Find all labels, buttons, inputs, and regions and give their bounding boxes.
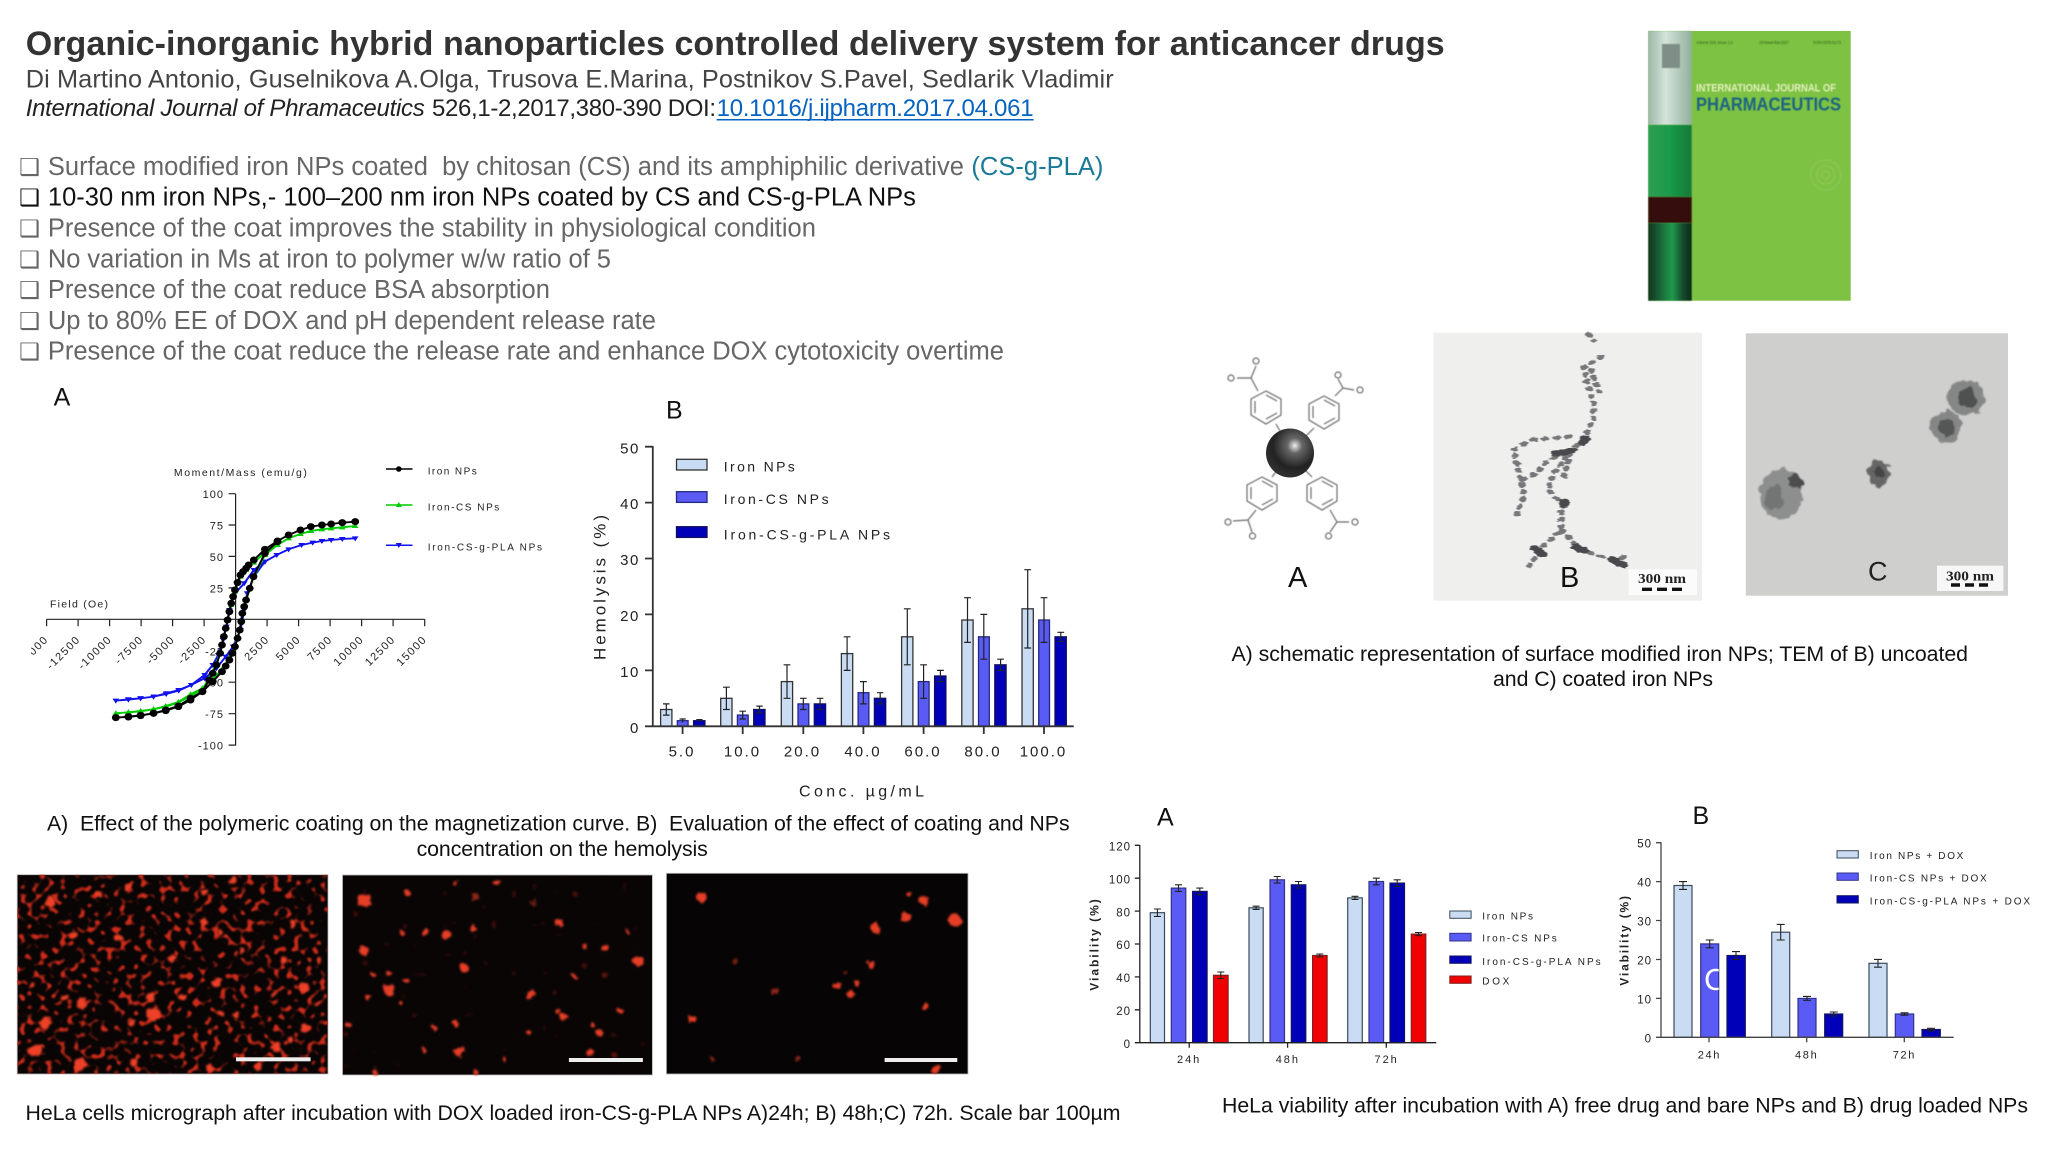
legend: Iron-CS-g-PLA NPs bbox=[724, 526, 890, 542]
scale bar: 300 nm bbox=[1638, 572, 1686, 587]
bullet 5: Presence of the coat reduce BSA absorption bbox=[48, 276, 550, 304]
caption: TEM bbox=[1232, 642, 1968, 691]
authors: Di Martino Antonio, Guselnikova A.Olga, Trusova E.Marina, Postnikov S.Pavel, Sedlarik Vladimir bbox=[26, 65, 1114, 93]
bars bbox=[1150, 880, 1426, 1043]
legend bbox=[1450, 911, 1601, 987]
bullet 5: ❑ bbox=[19, 276, 40, 304]
y tick labels: 75 bbox=[210, 520, 224, 532]
x tick labels: 72h bbox=[1893, 1049, 1914, 1061]
panel letter A: A bbox=[54, 384, 71, 412]
x tick labels: 100.0 bbox=[1020, 744, 1067, 761]
x tick labels: 48h bbox=[1795, 1049, 1817, 1061]
hexagon rings bbox=[1247, 391, 1339, 510]
bars bbox=[1674, 886, 1940, 1037]
y tick labels: 25 bbox=[210, 583, 224, 595]
stray white letter C on bar: C bbox=[1704, 962, 1726, 997]
hysteresis curves bbox=[116, 522, 355, 718]
y tick labels bbox=[620, 440, 640, 737]
y tick labels: 40 bbox=[620, 496, 640, 513]
x tick labels: -7500 bbox=[113, 634, 146, 667]
x tick labels: 48h bbox=[1276, 1054, 1298, 1066]
x tick labels bbox=[31, 637, 425, 668]
y axis title: Viability (%) bbox=[1088, 899, 1102, 991]
y tick labels bbox=[198, 489, 224, 753]
y tick labels: 10 bbox=[1637, 994, 1652, 1006]
bullet list bbox=[19, 153, 1103, 365]
bullet 1: (CS-g-PLA) bbox=[971, 153, 1103, 181]
bullet 2: 10-30 nm iron NPs,- 100–200 nm iron NPs coated by CS and CS-g-PLA NPs bbox=[48, 184, 916, 212]
y tick labels: 80 bbox=[1116, 907, 1131, 919]
legend: Iron NPs bbox=[428, 466, 477, 477]
y tick labels: 0 bbox=[1124, 1039, 1131, 1051]
panel: magnetization curve chart A: Field (Oe) bbox=[50, 599, 108, 611]
legend: Iron-CS NPs bbox=[1482, 934, 1557, 945]
y tick labels: -100 bbox=[198, 741, 224, 753]
error bars bbox=[663, 570, 1064, 722]
label B: B bbox=[1560, 562, 1579, 594]
panel letter A: A bbox=[1157, 804, 1174, 832]
legend: DOX bbox=[1482, 976, 1510, 987]
x tick labels: 5.0 bbox=[669, 744, 695, 761]
y tick labels: 30 bbox=[1637, 916, 1652, 928]
micrograph 72h bbox=[666, 873, 968, 1074]
bullet 4: No variation in Ms at iron to polymer w/w ratio of 5 bbox=[48, 245, 611, 273]
legend: Iron-CS-g-PLA NPs bbox=[428, 543, 542, 554]
x tick labels bbox=[1698, 1049, 1914, 1061]
y tick labels: 40 bbox=[1116, 973, 1131, 985]
legend: Iron NPs bbox=[1482, 911, 1533, 922]
panel: TEM uncoated B bbox=[1434, 333, 1702, 601]
y tick labels: 20 bbox=[1637, 956, 1652, 968]
x tick labels: 5000 bbox=[274, 634, 304, 663]
y tick labels: 60 bbox=[1116, 940, 1131, 952]
y tick labels: 120 bbox=[1109, 842, 1131, 854]
journal cover: INTERNATIONAL JOURNAL OF bbox=[1696, 83, 1836, 95]
panel: molecular schematic A bbox=[1225, 358, 1363, 594]
caption: viability: HeLa viability after incubation with A) free drug and bare NPs and B) drug loaded NPs bbox=[1222, 1094, 2028, 1118]
error bars bbox=[1679, 882, 1935, 1031]
axis titles: Moment/Mass (emu/g) bbox=[174, 467, 307, 479]
bullet 7: ❑ bbox=[19, 337, 40, 365]
axes bbox=[1135, 845, 1436, 1048]
panel: TEM coated C bbox=[1746, 333, 2008, 596]
y tick labels bbox=[1637, 839, 1652, 1045]
y axis title: Viability (%) bbox=[1617, 896, 1631, 986]
x tick labels: 20.0 bbox=[784, 744, 821, 761]
legend: Iron-CS NPs bbox=[724, 491, 829, 507]
legend bbox=[386, 466, 542, 554]
y tick labels: 10 bbox=[620, 664, 640, 681]
x tick labels: 72h bbox=[1374, 1054, 1397, 1066]
legend bbox=[676, 459, 890, 542]
bullet 1: Surface modified iron NPs coated by chitosan (CS) and its amphiphilic derivative bbox=[48, 153, 964, 181]
y tick labels: 20 bbox=[1116, 1006, 1131, 1018]
x tick labels: 60.0 bbox=[904, 744, 942, 761]
x tick labels: 7500 bbox=[305, 634, 335, 663]
legend: Iron-CS NPs + DOX bbox=[1870, 874, 1987, 885]
x tick labels bbox=[1177, 1054, 1397, 1066]
micrograph 24h bbox=[17, 875, 328, 1074]
y tick labels: 20 bbox=[620, 608, 640, 625]
scale bar bbox=[885, 1058, 957, 1062]
caption: magnetization and hemolysis: concentration on the hemolysis bbox=[417, 837, 708, 861]
bullet 4: ❑ bbox=[19, 245, 40, 273]
y tick labels: 100 bbox=[1109, 874, 1131, 886]
caption: micrographs: HeLa cells micrograph after incubation with DOX loaded iron-CS-g-PLA NPs A)24h; B) 48h;C) 72h. Scale bar 100µm bbox=[26, 1101, 1120, 1125]
x tick labels: 24h bbox=[1698, 1049, 1719, 1061]
y tick labels: 30 bbox=[620, 552, 640, 569]
x tick labels: -10000 bbox=[76, 634, 115, 672]
journal citation bbox=[26, 95, 1034, 122]
x tick labels: 2500 bbox=[242, 634, 272, 663]
x tick labels: 15000 bbox=[395, 634, 430, 669]
legend: Iron NPs bbox=[724, 459, 795, 475]
axes bbox=[47, 494, 425, 746]
x tick labels: 10000 bbox=[332, 634, 367, 669]
iron sphere bbox=[1266, 428, 1314, 478]
micrograph 48h bbox=[342, 875, 652, 1076]
journal cover: Volume 526, Issue 1-2 bbox=[1696, 40, 1733, 45]
panel letter B: B bbox=[666, 396, 683, 424]
bullet 2: ❑ bbox=[19, 184, 40, 212]
panel: viability chart A bbox=[1088, 804, 1601, 1066]
scale bar bbox=[569, 1058, 643, 1062]
bullet 1: ❑ bbox=[19, 153, 40, 181]
scale bar bbox=[1628, 569, 1697, 595]
x tick labels bbox=[669, 744, 1067, 761]
panel: hemolysis bar chart B bbox=[590, 396, 1074, 801]
legend: Iron NPs + DOX bbox=[1870, 851, 1964, 862]
y tick labels: 100 bbox=[203, 489, 224, 501]
journal citation: 526,1-2,2017,380-390 DOI: bbox=[432, 95, 716, 122]
caption: magnetization and hemolysis: A) Effect of the polymeric coating on the magnetization curve. B) Evaluation of the effect of coating and NPs bbox=[47, 812, 1070, 836]
bullet 3: ❑ bbox=[19, 215, 40, 243]
coated particles bbox=[1760, 380, 1984, 519]
journal cover: ISSN 0378-5173 bbox=[1813, 40, 1841, 45]
scale bar bbox=[236, 1057, 311, 1061]
y tick labels: 50 bbox=[620, 440, 640, 457]
y tick labels: 0 bbox=[630, 720, 640, 737]
bars bbox=[661, 609, 1066, 726]
x tick labels: 10.0 bbox=[724, 744, 761, 761]
legend: Iron-CS-g-PLA NPs + DOX bbox=[1870, 896, 2030, 907]
x tick labels: 40.0 bbox=[844, 744, 882, 761]
axes bbox=[645, 446, 1074, 734]
bullet 3: Presence of the coat improves the stability in physiological condition bbox=[48, 215, 816, 243]
journal citation: International Journal of Phramaceutics bbox=[26, 95, 425, 122]
legend: Iron-CS NPs bbox=[428, 502, 499, 513]
x tick labels: -2500 bbox=[176, 634, 209, 667]
title: Organic-inorganic hybrid nanoparticles controlled delivery system for anticancer drugs bbox=[26, 25, 1445, 63]
panel: viability chart B bbox=[1617, 802, 2030, 1061]
caption: TEM: and C) coated iron NPs bbox=[1493, 667, 1713, 691]
bullet 6: ❑ bbox=[19, 307, 40, 335]
y tick labels bbox=[1109, 842, 1131, 1051]
bullet 7: Presence of the coat reduce the release rate and enhance DOX cytotoxicity overtime bbox=[48, 337, 1004, 365]
scale bar bbox=[1937, 566, 2003, 591]
y tick labels: -25 bbox=[205, 646, 224, 658]
label A: A bbox=[1288, 562, 1308, 594]
x tick labels: 24h bbox=[1177, 1054, 1199, 1066]
y tick labels: -50 bbox=[205, 678, 224, 690]
journal cover: 15 November 2017 bbox=[1759, 40, 1789, 45]
y tick labels: 40 bbox=[1637, 878, 1652, 890]
x axis title: Conc. µg/mL bbox=[799, 784, 924, 801]
caption: magnetization and hemolysis bbox=[47, 812, 1070, 861]
label C: C bbox=[1868, 557, 1888, 587]
y tick labels: -75 bbox=[205, 709, 224, 721]
y tick labels: 0 bbox=[1645, 1033, 1652, 1045]
y tick labels: 50 bbox=[1637, 839, 1652, 851]
y tick labels: 50 bbox=[210, 552, 224, 564]
error bars bbox=[1154, 876, 1422, 979]
journal cover bbox=[1648, 31, 1851, 301]
legend bbox=[1837, 851, 2030, 907]
panel: magnetization curve chart A bbox=[12, 384, 542, 753]
scale bar: 300 nm bbox=[1946, 570, 1994, 585]
legend: Iron-CS-g-PLA NPs bbox=[1482, 957, 1601, 968]
caption: TEM: A) schematic representation of surface modified iron NPs; TEM of B) uncoated bbox=[1232, 642, 1968, 666]
journal cover: PHARMACEUTICS bbox=[1696, 95, 1841, 115]
x tick labels: -15000 bbox=[12, 634, 51, 672]
x tick labels: 80.0 bbox=[964, 744, 1002, 761]
y axis title: Hemolysis (%) bbox=[590, 515, 610, 660]
x tick labels: -12500 bbox=[44, 634, 83, 672]
x tick labels: -5000 bbox=[144, 634, 178, 667]
panel letter B: B bbox=[1692, 802, 1709, 830]
x tick labels: 12500 bbox=[363, 634, 398, 669]
particle chains bbox=[1513, 334, 1631, 568]
journal citation: 10.1016/j.ijpharm.2017.04.061 bbox=[717, 95, 1034, 122]
axes bbox=[1656, 842, 1954, 1042]
bullet 6: Up to 80% EE of DOX and pH dependent release rate bbox=[48, 307, 656, 335]
